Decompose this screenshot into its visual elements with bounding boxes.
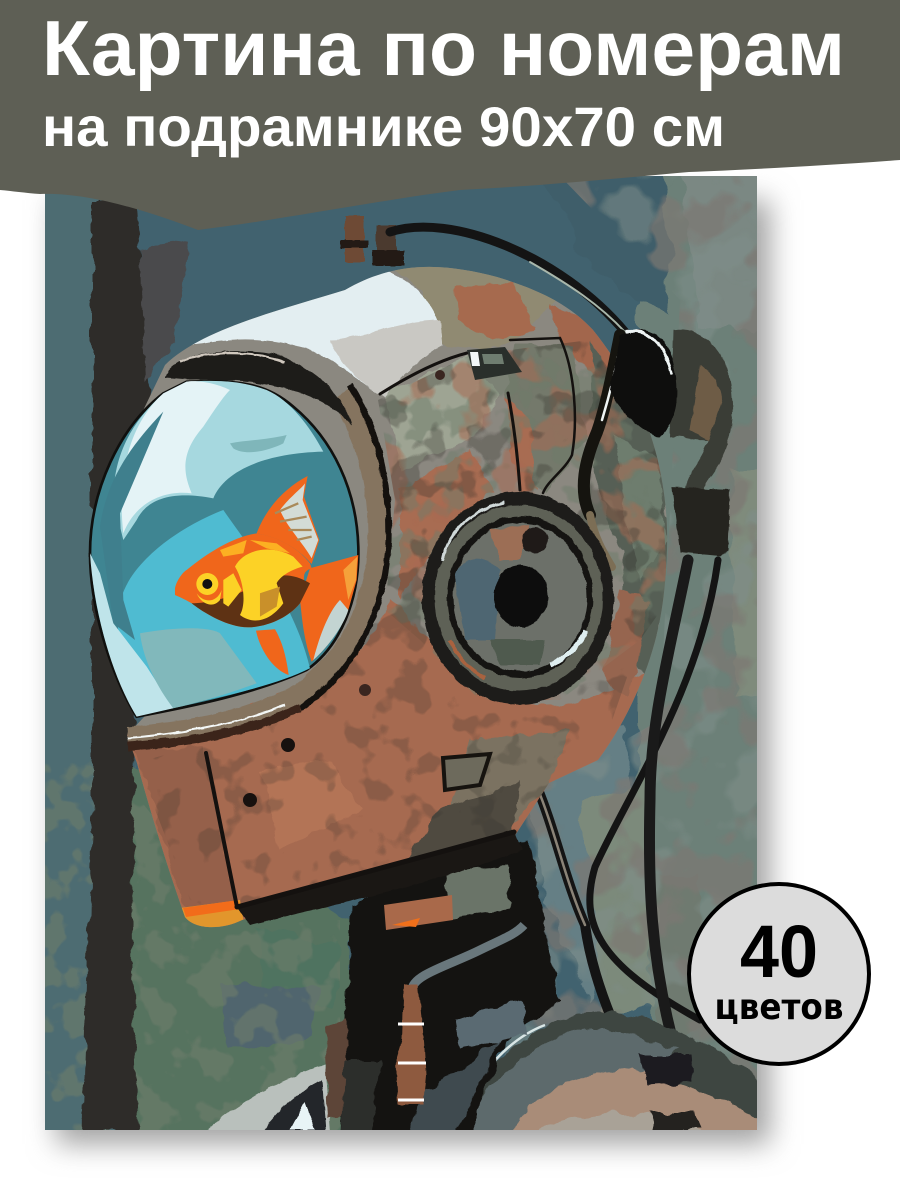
dark under-chin band <box>237 830 522 925</box>
robot shoulders <box>205 838 770 1140</box>
speaker ear ring <box>422 492 614 704</box>
upper dark crescent <box>165 351 352 425</box>
badge caption: цветов <box>714 987 844 1028</box>
grey-green panel <box>385 355 500 470</box>
dark vertical band <box>82 200 152 1130</box>
top wire and headphone cable <box>390 227 625 567</box>
glass dome <box>90 381 358 717</box>
banner shape <box>0 0 900 230</box>
water light blue <box>118 510 310 713</box>
headphone unit <box>610 329 733 556</box>
goldfish <box>175 476 358 675</box>
rust seam area <box>505 395 535 495</box>
shoulder right <box>474 1010 757 1130</box>
canvas drop shadow <box>56 200 770 1144</box>
far wires behind helmet <box>537 560 718 1053</box>
rust lower <box>120 600 665 925</box>
fish eye <box>196 573 218 595</box>
panel lines and seams <box>206 338 575 907</box>
badge circle <box>689 884 869 1064</box>
robot neck <box>325 838 560 1135</box>
neck rust band <box>384 895 453 930</box>
top bolts <box>340 215 404 266</box>
belly shadow <box>192 575 310 627</box>
helmet mottling <box>154 341 666 904</box>
shoulder left <box>205 1065 330 1132</box>
fish body <box>175 533 312 627</box>
painting: robot with goldfish helmet <box>30 160 770 1140</box>
dorsal fin <box>257 476 319 564</box>
orange chin lip <box>182 900 244 928</box>
title line 2: на подрамнике 90х70 см <box>42 95 725 158</box>
robot helmet <box>127 266 668 928</box>
side connector box <box>672 487 730 556</box>
badge number: 40 <box>740 910 818 993</box>
rust patch crown <box>455 283 535 340</box>
top tan <box>395 266 556 349</box>
tail fin <box>300 555 358 662</box>
anal fin <box>256 629 289 675</box>
yellow scales <box>235 550 303 621</box>
helmet colour masses <box>127 266 668 928</box>
curved pipe in neck <box>412 925 524 990</box>
white top of helmet <box>192 272 442 398</box>
helmet rivets and plates <box>243 347 522 807</box>
dark right side <box>590 340 672 680</box>
title line 1: Картина по номерам <box>42 4 845 92</box>
header banner <box>0 0 900 230</box>
pale glare <box>113 381 323 540</box>
helmet window rim <box>128 351 389 746</box>
painting background <box>30 160 770 1140</box>
rust strut <box>396 985 426 1105</box>
background mottling <box>504 176 757 1056</box>
fishbowl glass and goldfish <box>90 381 358 717</box>
badge: 40 colours <box>689 884 869 1064</box>
